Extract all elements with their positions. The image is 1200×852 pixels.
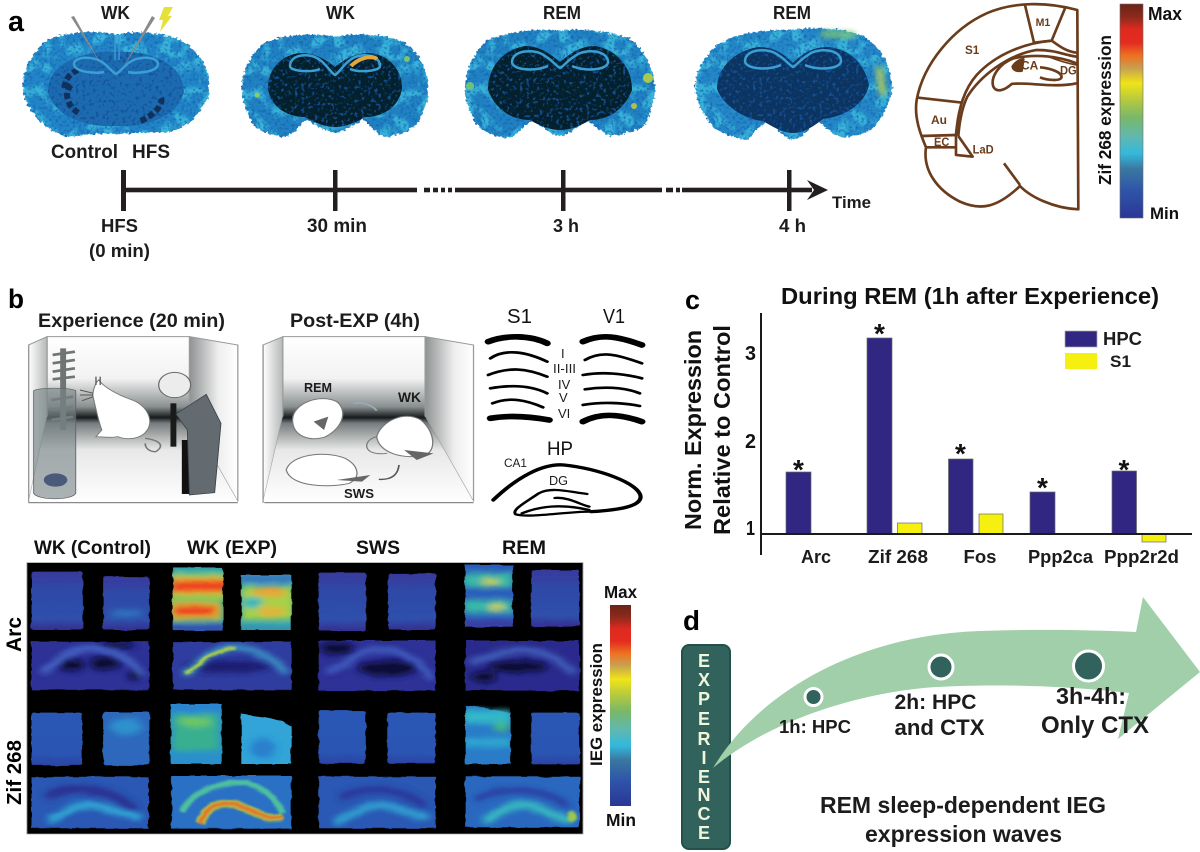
heading: REM at 4 h: REM (773, 3, 811, 23)
brain section 4 (4 h) (695, 28, 892, 140)
Arc cortex: SWS (319, 573, 436, 631)
heading: REM at 3 h: REM (543, 3, 581, 23)
brain section 3 (3 h) (465, 30, 655, 138)
Zif cortex: WK EXP left (169, 704, 224, 764)
Zif hippocampus: WK control (31, 776, 150, 829)
y axis title line 1: Norm. Expression (680, 330, 706, 530)
significance stars: * (1037, 472, 1048, 503)
heat map grid (27, 563, 583, 834)
layer label V: V (559, 390, 568, 405)
bars (786, 338, 1166, 542)
heading: Post-EXP (4h): Post-EXP (4h) (290, 310, 420, 332)
diagram: cortical layers (488, 306, 642, 422)
brain atlas diagram (916, 4, 1078, 209)
Arc hippocampus: SWS (318, 640, 436, 692)
experience box: R (698, 729, 710, 749)
Zif cortex: WK control (32, 712, 149, 765)
panel letter c: c (685, 285, 700, 315)
layer lines (488, 337, 642, 422)
scale title: Zif 268 expression (1095, 35, 1115, 185)
label: Control: Control (51, 142, 118, 163)
heading: WK (Control): WK (Control) (34, 538, 151, 559)
y tick 3: 3 (745, 343, 756, 365)
axis label: Time: Time (832, 193, 871, 212)
Zif hippocampus: WK EXP (170, 775, 292, 830)
layer label VI: VI (558, 406, 570, 421)
x label Ppp2ca: Ppp2ca (1028, 546, 1094, 567)
y tick 2: 2 (745, 431, 756, 453)
y axis title line 2: Relative to Control (709, 325, 735, 535)
cage label SWS: SWS (344, 486, 374, 501)
experience box: E (698, 767, 710, 787)
heading: WK at HFS: WK (101, 3, 130, 23)
Arc hippocampus: WK EXP (172, 641, 292, 691)
label and CTX: and CTX (894, 715, 985, 740)
timeline arrow (121, 170, 828, 211)
caption line 2: expression waves (865, 821, 1062, 847)
diagram: hippocampus (493, 439, 641, 516)
Arc cortex: REM right (531, 570, 580, 627)
x label Fos: Fos (964, 546, 996, 567)
panel letter a: a (8, 6, 25, 38)
chart title: During REM (1h after Experience) (781, 283, 1159, 309)
experience box: P (698, 689, 710, 709)
brain section 2 (30 min) (242, 35, 428, 137)
label Only CTX: Only CTX (1041, 712, 1149, 739)
caption line 1: REM sleep-dependent IEG (820, 792, 1106, 818)
experience box (682, 645, 730, 849)
colour scale: IEG expression (587, 582, 637, 830)
Zif hippocampus: SWS (318, 776, 436, 829)
Arc cortex: WK EXP right (240, 574, 293, 630)
heading: WK at 30 min: WK (326, 3, 355, 23)
heading: Experience (20 min): Experience (20 min) (38, 310, 225, 332)
icon: lightning bolt (159, 7, 173, 32)
significance stars: * (1119, 454, 1130, 485)
label S1: S1 (507, 306, 532, 328)
Arc hippocampus: WK control (30, 641, 150, 692)
experience box: C (698, 804, 710, 824)
scale label Max: Max (1148, 4, 1182, 24)
y tick 1: 1 (746, 518, 755, 540)
tick label: 30 min: 30 min (307, 216, 367, 237)
significance stars (793, 318, 1130, 503)
experience box: E (698, 709, 710, 729)
experience box: N (698, 785, 710, 805)
atlas label DG: DG (1060, 65, 1077, 78)
Zif cortex: REM right (531, 713, 580, 764)
Zif cortex: WK EXP right (240, 714, 292, 764)
Arc cortex: WK EXP left (172, 566, 224, 632)
heading: REM: REM (502, 537, 546, 559)
scale title: IEG expression (587, 643, 606, 766)
label: HFS: HFS (132, 142, 170, 163)
cage label REM: REM (304, 380, 332, 395)
atlas label Au: Au (931, 114, 947, 127)
layer label IV: IV (558, 377, 571, 392)
x label Ppp2r2d: Ppp2r2d (1104, 546, 1179, 567)
illustration: post-experience cage (263, 337, 474, 503)
legend label S1: S1 (1110, 352, 1131, 371)
Arc hippocampus: REM (464, 640, 581, 692)
tick label: (0 min): (0 min) (89, 240, 150, 261)
panel letter b: b (8, 284, 24, 314)
label 2h: HPC: 2h: HPC (894, 691, 976, 714)
scale label Min: Min (1150, 204, 1179, 223)
panel letter d: d (683, 605, 700, 636)
tick label: 4 h: 4 h (779, 216, 806, 236)
significance stars: * (793, 454, 804, 485)
panel: d — IEG waves (682, 597, 1200, 849)
atlas label EC: EC (934, 136, 950, 149)
scale label Min: Min (606, 810, 636, 830)
layer label I: I (561, 346, 565, 361)
legend label HPC: HPC (1103, 329, 1142, 349)
heading: WK (EXP): WK (EXP) (187, 537, 277, 559)
row label: Arc: Arc (3, 617, 26, 652)
illustration: experience cage (29, 337, 238, 503)
label HP: HP (547, 439, 573, 460)
x label Zif 268: Zif 268 (868, 546, 928, 567)
Arc cortex: REM left (464, 564, 514, 628)
timepoint dot 2h (929, 655, 953, 679)
panel: a — timeline of brain sections (8, 3, 1182, 261)
panel: b — experience and IEG maps (3, 284, 642, 834)
layer label II-III: II-III (553, 361, 576, 376)
label 3h-4h: 3h-4h: (1056, 683, 1126, 709)
tick label: 3 h: 3 h (553, 216, 579, 236)
panel: c — bar chart (680, 283, 1192, 567)
electrode: HFS (123, 16, 155, 68)
atlas label LaD: LaD (973, 143, 994, 156)
significance stars: * (955, 438, 966, 469)
row label: Zif 268: Zif 268 (3, 740, 26, 805)
Zif cortex: SWS (319, 711, 436, 763)
significance stars: * (874, 318, 885, 349)
axes (761, 313, 1192, 555)
electrode: control (71, 16, 102, 66)
cage label WK: WK (398, 389, 421, 405)
curved arrow (713, 597, 1200, 768)
Arc cortex: WK control (32, 572, 149, 630)
timepoint dot 1h (805, 688, 822, 706)
experience box: E (698, 823, 710, 843)
colour scale: Zif 268 expression (1095, 4, 1182, 223)
scale label Max: Max (604, 582, 637, 602)
label V1: V1 (603, 306, 625, 328)
legend (1065, 329, 1142, 371)
label 1h: HPC: 1h: HPC (779, 717, 851, 737)
experience box: E (698, 651, 710, 671)
label CA1: CA1 (504, 456, 527, 470)
Zif cortex: REM left (464, 705, 512, 764)
brain section 1 (HFS) (23, 32, 209, 136)
atlas label M1: M1 (1036, 17, 1050, 29)
x label Arc: Arc (801, 547, 831, 567)
atlas label S1: S1 (965, 44, 980, 57)
label DG: DG (549, 474, 568, 488)
heading: SWS: SWS (356, 537, 400, 559)
tick label: HFS (0 min): HFS (101, 215, 138, 236)
timepoint dot 3h-4h (1074, 651, 1104, 681)
atlas label CA: CA (1021, 59, 1039, 72)
Zif hippocampus: REM (464, 776, 581, 828)
hippocampal outlines (493, 465, 641, 516)
experience box: X (698, 670, 710, 690)
experience box: I (701, 748, 707, 768)
